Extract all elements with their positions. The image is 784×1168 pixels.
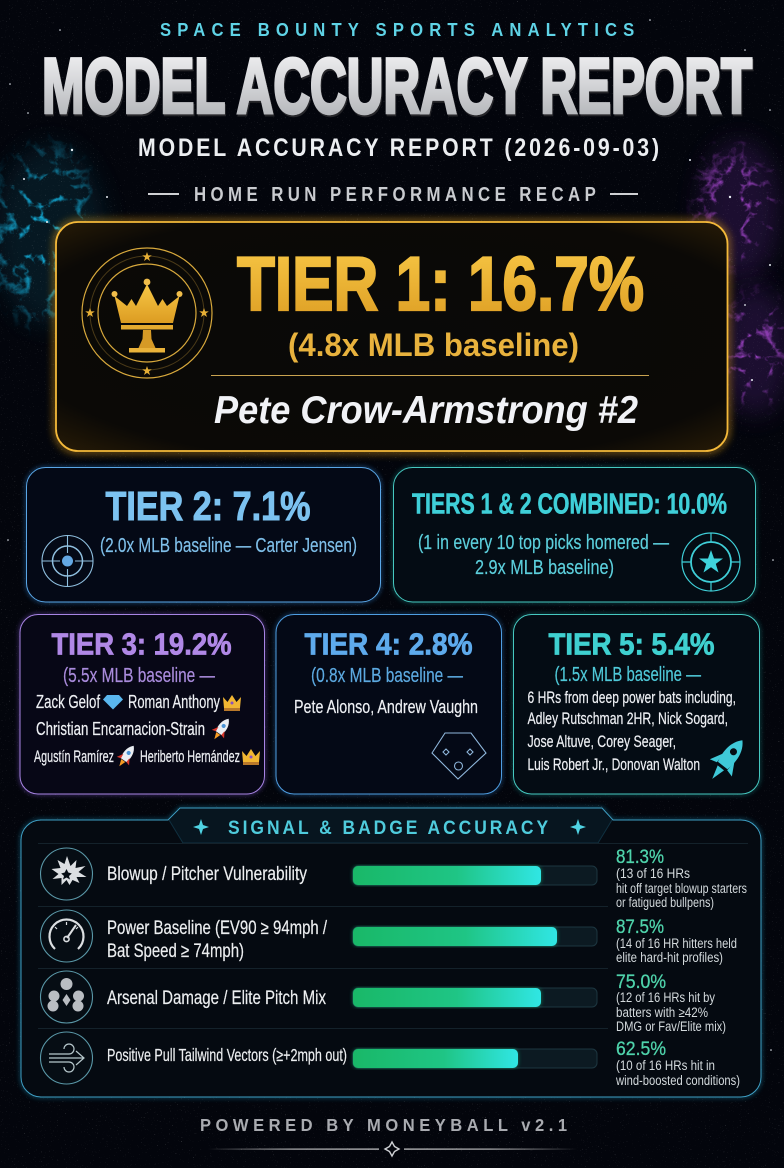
combined detail: 2.9x MLB baseline) <box>475 557 614 579</box>
value: 75.0 <box>616 972 726 1034</box>
tier 5 multiplier: (1.5x MLB baseline — <box>554 664 701 686</box>
value: 81.3: (13 of 16 HRs <box>616 866 690 881</box>
tier 5 heading: TIER 5: 5.4% <box>548 626 714 662</box>
row: blowup: Blowup / Pitcher Vulnerability <box>107 864 307 885</box>
value: 81.3: 81.3% <box>616 847 664 868</box>
row: blowup <box>40 847 747 910</box>
tier 3 players: Roman Anthony <box>128 692 220 712</box>
value: 75.0: batters with ≥42% <box>616 1005 708 1020</box>
tier 3 heading: TIER 3: 19.2% <box>52 626 232 662</box>
value: 62.5: (10 of 16 HRs hit in <box>616 1058 715 1073</box>
tier 1 player: Pete Crow-Armstrong #2 <box>214 389 638 432</box>
bar track and fill: 87.5 <box>353 927 597 946</box>
row: power baseline: Bat Speed ≥ 74mph) <box>107 941 244 962</box>
icon: pitch mix <box>40 971 92 1023</box>
bar track and fill: 62.5 <box>353 1049 597 1068</box>
tier 3 players: Heriberto Hernández <box>140 748 240 766</box>
row: tailwind: Positive Pull Tailwind Vectors (≥+2mph out) <box>107 1045 347 1065</box>
row: power baseline: Power Baseline (EV90 ≥ 94mph / <box>107 918 328 939</box>
icon: rocket <box>701 732 753 788</box>
icon: star target <box>682 533 740 591</box>
row: arsenal damage <box>40 971 726 1034</box>
tier 5 players <box>528 688 736 774</box>
section tab: SIGNAL & BADGE ACCURACY <box>228 816 548 838</box>
tier 5 players: Luis Robert Jr., Donovan Walton <box>528 755 700 774</box>
tier 4 multiplier: (0.8x MLB baseline — <box>311 665 463 687</box>
combined detail <box>418 532 669 579</box>
tier 3 players: Christian Encarnacion-Strain <box>36 719 205 739</box>
tier 4 heading: TIER 4: 2.8% <box>304 626 472 662</box>
value: 75.0: DMG or Fav/Elite mix) <box>616 1019 726 1034</box>
icon: gauge <box>40 910 92 962</box>
value: 75.0: 75.0% <box>616 972 666 993</box>
footer: POWERED BY MONEYBALL v2.1 <box>200 1114 567 1135</box>
icon: target <box>42 535 93 587</box>
value: 81.3: or fatigued bullpens) <box>616 895 714 910</box>
value: 87.5: 87.5% <box>616 917 664 938</box>
row: power baseline <box>40 910 737 965</box>
value: 87.5: (14 of 16 HR hitters held <box>616 936 737 951</box>
icon: rocket emoji <box>113 741 140 771</box>
icon: crown emoji <box>242 749 260 765</box>
header: brand line: SPACE BOUNTY SPORTS ANALYTICS <box>160 19 635 40</box>
tier 3 players: Zack Gelof <box>36 692 101 712</box>
icon: explosion <box>40 848 92 900</box>
icon: diamond <box>103 695 123 710</box>
section tab <box>169 808 612 843</box>
value: 87.5 <box>616 917 737 965</box>
panel: tier 5 <box>514 614 760 794</box>
panel: tier 1 hero <box>56 222 728 451</box>
bar track and fill: 81.3 <box>353 866 597 885</box>
tier 1 headline: TIER 1: 16.7% <box>237 242 644 327</box>
tier 5 players: Jose Altuve, Corey Seager, <box>528 732 676 751</box>
value: 81.3 <box>616 847 747 910</box>
tier 2 heading: TIER 2: 7.1% <box>106 483 310 529</box>
tier 3 multiplier: (5.5x MLB baseline — <box>63 665 215 687</box>
bar track and fill: 75.0 <box>353 988 597 1007</box>
tier 4 players: Pete Alonso, Andrew Vaughn <box>294 696 478 717</box>
panel: tier 2 <box>26 468 380 602</box>
icon: crown medallion <box>82 248 212 378</box>
value: 75.0: (12 of 16 HRs hit by <box>616 990 715 1005</box>
row: arsenal damage: Arsenal Damage / Elite Pitch Mix <box>107 988 326 1009</box>
icon: crown emoji <box>223 695 241 711</box>
tier 2 detail: (2.0x MLB baseline — Carter Jensen) <box>100 535 357 557</box>
tier 3 players <box>34 692 240 766</box>
combined detail: (1 in every 10 top picks homered — <box>418 532 669 554</box>
icon: wind <box>40 1032 92 1084</box>
subtitle: MODEL ACCURACY REPORT (2026-09-03) <box>138 133 659 161</box>
tier 1 multiplier: (4.8x MLB baseline) <box>288 327 579 363</box>
panel: tiers 1 and 2 combined <box>394 468 756 602</box>
panel: tier 3 <box>20 614 264 794</box>
icon: rocket emoji <box>208 714 235 744</box>
panel: tier 4 <box>276 614 502 794</box>
panel: signal and badge accuracy <box>21 808 761 1097</box>
icon: baseball diamond <box>432 733 486 779</box>
value: 62.5: 62.5% <box>616 1039 666 1060</box>
value: 62.5: wind-boosted conditions) <box>615 1073 740 1088</box>
footer <box>200 1114 577 1156</box>
value: 62.5 <box>615 1039 740 1088</box>
tier 3 players: Agustín Ramírez <box>34 748 114 766</box>
row: tailwind <box>40 1032 740 1088</box>
section heading: HOME RUN PERFORMANCE RECAP <box>194 182 596 205</box>
value: 87.5: elite hard-hit profiles) <box>616 950 723 965</box>
value: 81.3: hit off target blowup starters <box>616 881 747 896</box>
